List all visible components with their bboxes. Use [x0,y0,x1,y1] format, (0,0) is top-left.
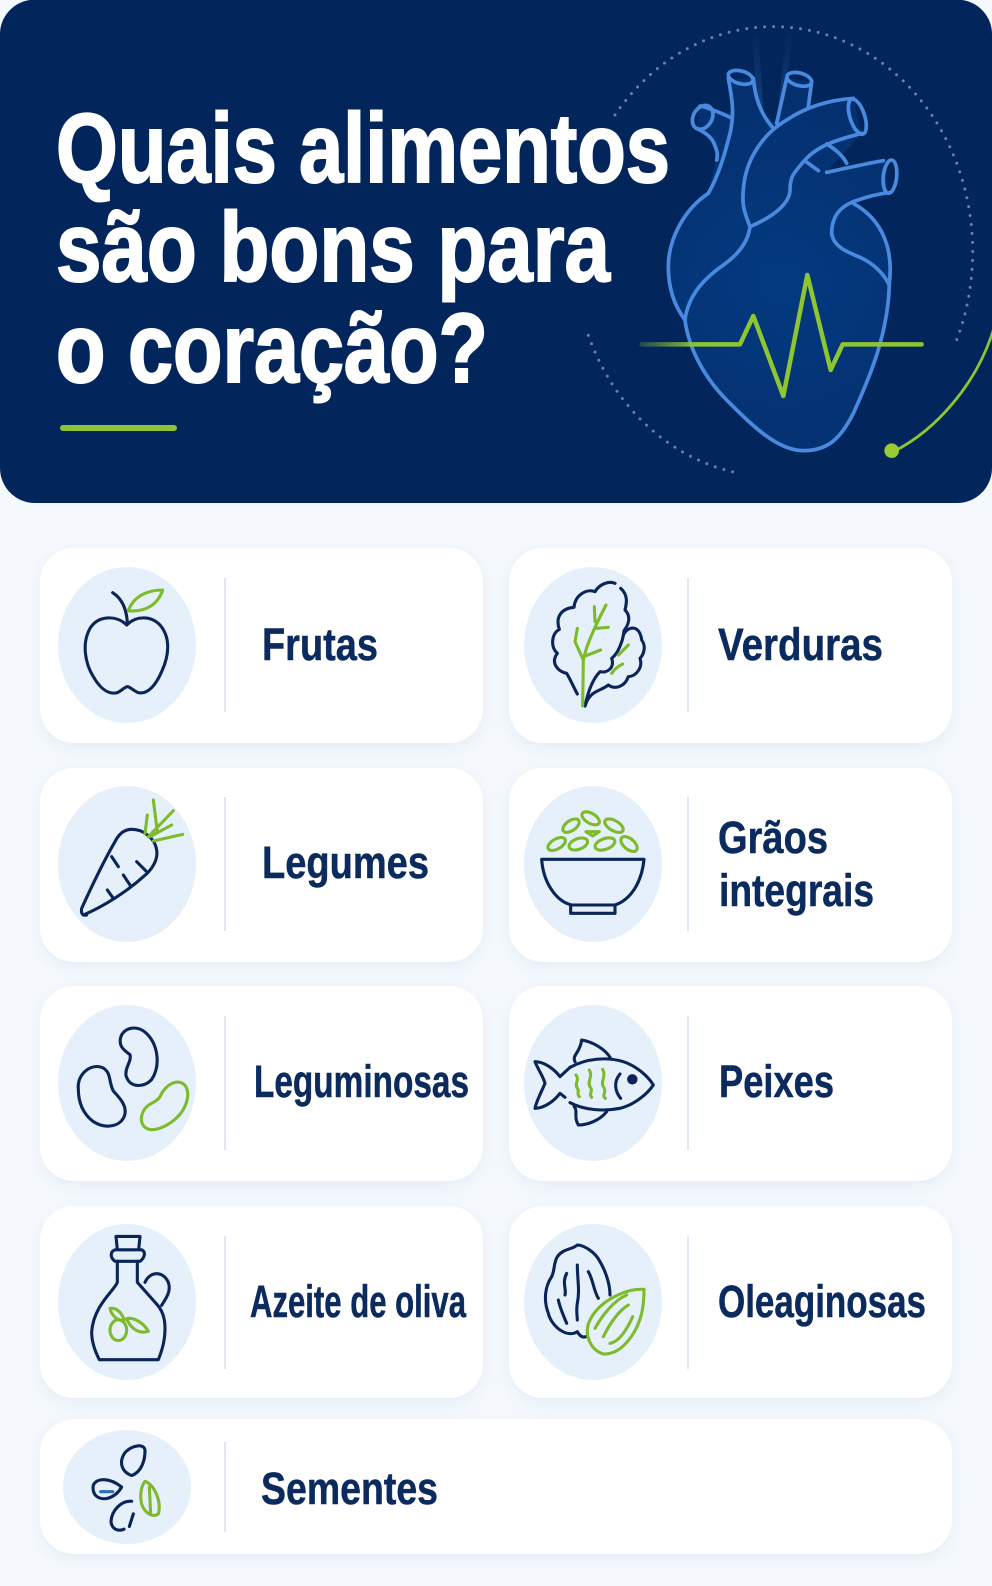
card: Peixes [509,986,952,1181]
card: Leguminosas: Leguminosas [254,1056,469,1107]
card: Azeite de oliva [40,1206,483,1398]
title: Quais alimentos [56,93,670,203]
card: Sementes [40,1419,952,1554]
card: Sementes: Sementes [261,1463,438,1514]
card: Oleaginosas: Oleaginosas [718,1276,926,1327]
card: Grãos integrais [509,768,952,962]
icon: fish [535,1040,653,1125]
icon: leafy greens [553,582,644,706]
card: Leguminosas [40,986,483,1181]
icon: olive oil bottle [92,1236,169,1360]
icon: beans [78,1028,188,1130]
card: Legumes [40,768,483,962]
card: Frutas: Frutas [262,619,378,670]
panel: header [0,0,992,503]
icon: walnut and almond [545,1245,644,1354]
icon: bowl of grains [542,809,644,913]
title: são bons para [56,192,611,302]
icon: carrot [81,800,183,915]
illustration: heart with pulse [588,27,992,472]
card: Oleaginosas [509,1206,952,1398]
title underline [60,425,177,431]
icon: seeds [93,1446,159,1530]
icon: apple [85,590,168,693]
card: Peixes: Peixes [719,1056,834,1107]
card: Frutas [40,548,483,743]
title [56,93,670,403]
card: Grãos integrais: integrais [719,865,874,916]
card: Verduras [509,548,952,743]
card: Verduras: Verduras [718,619,883,670]
card: Azeite de oliva: Azeite de oliva [250,1276,467,1327]
card: Legumes: Legumes [262,837,429,888]
card: Grãos integrais: Grãos [718,812,828,863]
title: o coração? [56,293,488,403]
